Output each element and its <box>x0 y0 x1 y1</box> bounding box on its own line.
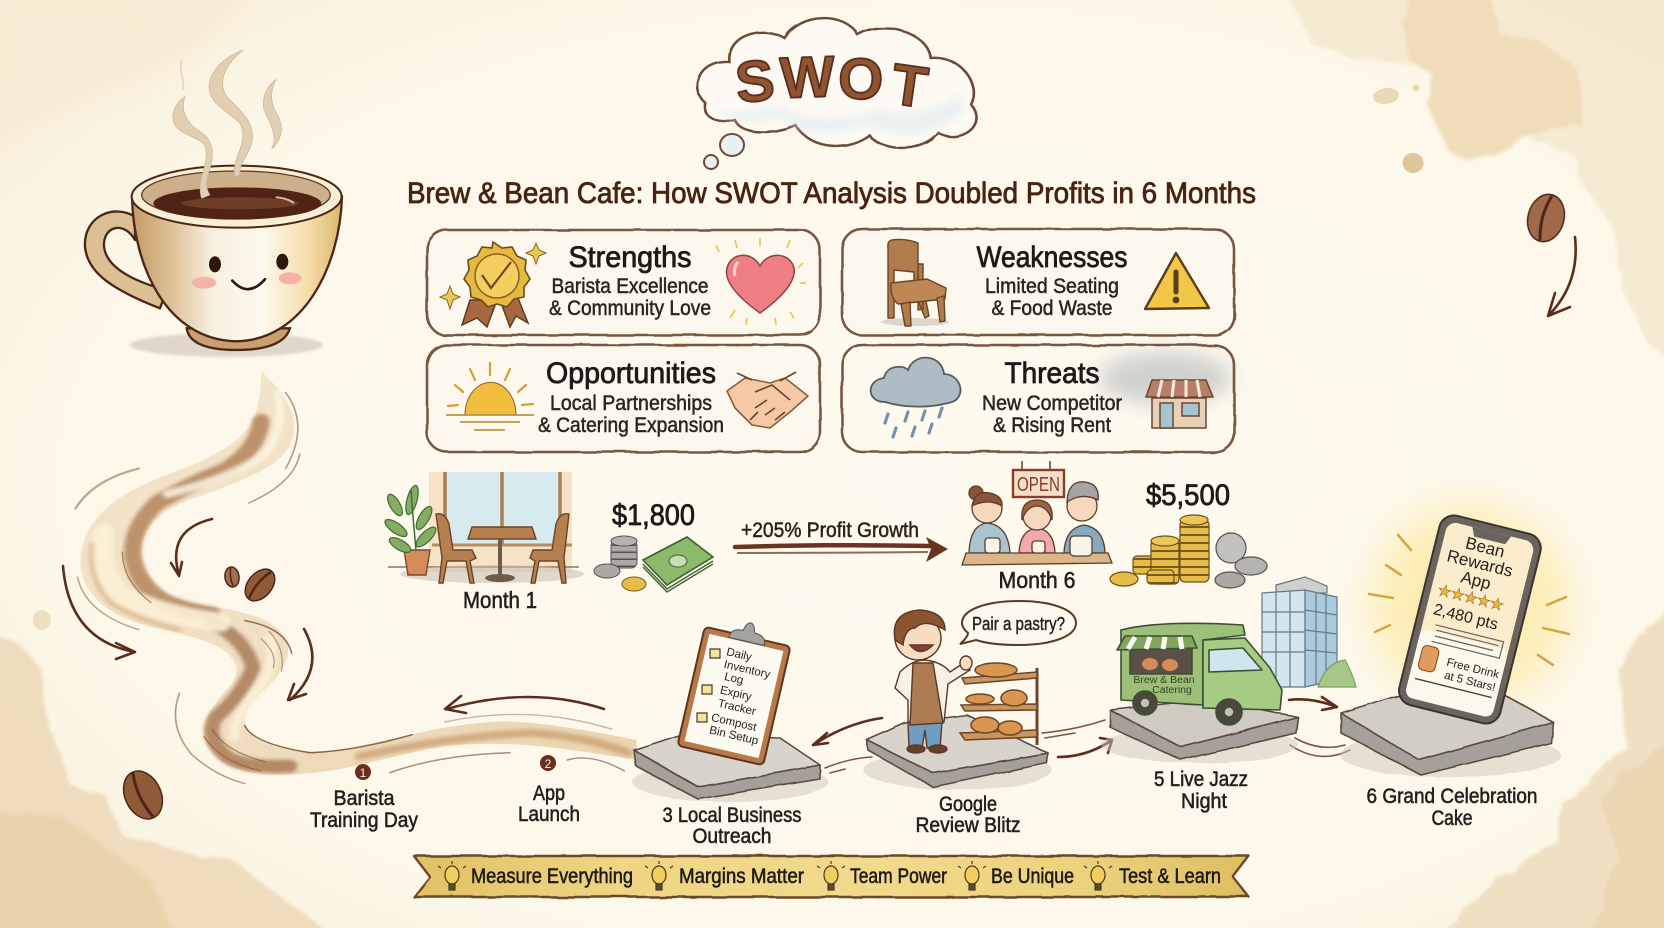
text: weaknesses: Weaknesses <box>976 241 1128 274</box>
swirl shading bands <box>91 393 628 766</box>
coffee beans <box>116 190 1570 825</box>
profit growth arrow: +205% Profit Growth <box>741 519 919 542</box>
timeline step 4: barista on stone <box>864 601 1076 837</box>
steam wisps <box>173 50 281 198</box>
timeline step 6: rewards app on stone <box>1340 475 1600 830</box>
ribbon text: Measure Everything <box>471 865 633 888</box>
cup foot <box>187 328 290 350</box>
text: strengths <box>549 241 711 320</box>
clipboard <box>677 613 794 765</box>
text: weaknesses: & Food Waste <box>992 297 1112 320</box>
timeline step 4: barista on stone: Review Blitz <box>916 814 1020 837</box>
table <box>468 527 536 539</box>
month 1 label: Month 1 <box>463 587 537 613</box>
checklist <box>697 646 772 747</box>
timeline step 2: 2 <box>545 757 552 771</box>
window and wall <box>429 472 572 572</box>
icon: rain cloud <box>871 358 960 437</box>
panel: weaknesses <box>842 229 1234 335</box>
cup handle <box>85 211 167 308</box>
month 1 profit <box>594 499 713 592</box>
app screen text: Bean <box>1464 533 1507 562</box>
coffee surface <box>153 187 321 219</box>
checklist: Bin Setup <box>708 725 759 747</box>
text: threats: & Rising Rent <box>993 414 1111 437</box>
profit growth arrow <box>735 519 948 562</box>
timeline step 5: catering truck on stone <box>1102 577 1356 813</box>
stone platform <box>1340 693 1560 777</box>
checklist: Compost <box>710 712 758 734</box>
timeline step 5: catering truck on stone: Night <box>1181 790 1227 813</box>
takeaways ribbon <box>414 856 1249 897</box>
coffee cup mascot <box>85 50 342 357</box>
step 5 label: 5 Live Jazz <box>1154 768 1248 791</box>
cup rim <box>132 166 342 228</box>
building <box>1262 577 1356 687</box>
text: strengths: & Community Love <box>549 297 711 320</box>
app screen text: Free Drink <box>1445 657 1500 681</box>
month 6 profit <box>1110 479 1267 588</box>
app screen text: ★★★★★ <box>1436 580 1506 615</box>
swirl sketch lines <box>75 393 624 784</box>
icon: coin stacks <box>1110 515 1267 588</box>
icon: warning <box>1145 253 1209 309</box>
ribbon text: Team Power <box>850 865 947 888</box>
coffee swirl path <box>75 371 636 784</box>
food truck: Brew & Bean <box>1133 674 1195 686</box>
open sign: OPEN <box>1017 474 1060 496</box>
checklist: Tracker <box>717 698 757 718</box>
text: threats: Threats <box>1004 357 1100 390</box>
stone platform <box>632 735 828 802</box>
text: threats: New Competitor <box>982 392 1122 415</box>
ribbon text: Test & Learn <box>1119 865 1221 888</box>
speech bubble <box>960 601 1076 645</box>
icon: handshake <box>727 372 808 428</box>
icon: shop <box>1146 380 1213 428</box>
glow rays <box>1369 535 1569 665</box>
timeline step 2: App <box>533 782 565 805</box>
text: strengths: Strengths <box>568 241 692 274</box>
text: threats <box>982 357 1122 437</box>
cup shadow <box>130 333 323 357</box>
panel: threats <box>842 345 1234 452</box>
app screen text: App <box>1459 568 1493 593</box>
month 6 label: Month 6 <box>998 567 1076 593</box>
ribbon text <box>471 865 1221 888</box>
thin path dashes <box>825 720 1350 773</box>
app screen text: Rewards <box>1445 546 1515 581</box>
food truck: Catering <box>1152 684 1192 696</box>
timeline step 6: rewards app on stone: Cake <box>1432 807 1472 830</box>
panel: opportunities <box>427 345 820 452</box>
text: opportunities: & Catering Expansion <box>538 414 724 437</box>
icon: coins and cash <box>594 536 713 592</box>
app screen text <box>1432 533 1515 694</box>
icon: heart <box>716 238 806 325</box>
checklist: Inventory <box>723 659 772 681</box>
text: opportunities: Local Partnerships <box>550 392 712 415</box>
timeline step 2 <box>518 755 580 826</box>
month 6 cafe scene <box>962 461 1112 593</box>
icon: medal <box>440 242 546 327</box>
month 6 profit: $5,500 <box>1146 479 1230 512</box>
flow arrows along swirl <box>63 237 1576 757</box>
text: weaknesses: Limited Seating <box>985 275 1119 298</box>
checklist: Daily <box>725 646 753 664</box>
timeline step 1 <box>310 764 418 832</box>
plant <box>404 550 430 575</box>
timeline step 1: 1 <box>360 766 367 780</box>
text: opportunities <box>538 357 724 437</box>
timeline step 1: Barista <box>334 787 395 810</box>
speech bubble: Pair a pastry? <box>972 614 1065 634</box>
timeline step 3: clipboard on stone <box>632 613 828 848</box>
phone glow <box>1340 475 1600 735</box>
panel: strengths <box>427 230 820 335</box>
chairs <box>436 514 569 583</box>
text: weaknesses <box>976 241 1128 320</box>
cup body <box>132 197 342 341</box>
app screen text: 2,480 pts <box>1432 601 1500 634</box>
step 3 label: 3 Local Business <box>662 804 802 827</box>
food truck <box>1117 623 1282 725</box>
barista <box>894 610 972 753</box>
ribbon text: Be Unique <box>991 865 1074 888</box>
checklist: Log <box>723 671 744 687</box>
icon: sunrise <box>446 363 534 430</box>
timeline step 3: clipboard on stone: Outreach <box>692 825 772 848</box>
month 1 cafe scene <box>382 472 584 613</box>
title: Brew & Bean Cafe: How SWOT Analysis Doubled Profits in 6 Months <box>407 177 1256 210</box>
step 4 label: Google <box>939 793 997 816</box>
customers <box>962 482 1112 565</box>
month 1 profit: $1,800 <box>612 499 695 532</box>
phone <box>1396 512 1544 727</box>
SWOT lettering: SWOT <box>732 44 932 121</box>
open sign <box>1013 461 1064 497</box>
cup face <box>192 254 301 289</box>
step 6 label: 6 Grand Celebration <box>1366 785 1538 808</box>
text: opportunities: Opportunities <box>546 357 716 390</box>
timeline step 1: Training Day <box>310 809 418 832</box>
icon: chair <box>881 239 949 326</box>
stone platform <box>1102 703 1298 763</box>
checklist: Expiry <box>719 685 753 703</box>
thought cloud with SWOT <box>698 18 977 169</box>
app screen text: at 5 Stars! <box>1443 670 1497 694</box>
timeline step 2: Launch <box>518 803 580 826</box>
pastry rack <box>960 663 1037 745</box>
stone platform <box>864 715 1052 790</box>
bulb icons <box>438 861 1112 890</box>
text: strengths: Barista Excellence <box>552 275 708 298</box>
ribbon text: Margins Matter <box>679 865 804 888</box>
